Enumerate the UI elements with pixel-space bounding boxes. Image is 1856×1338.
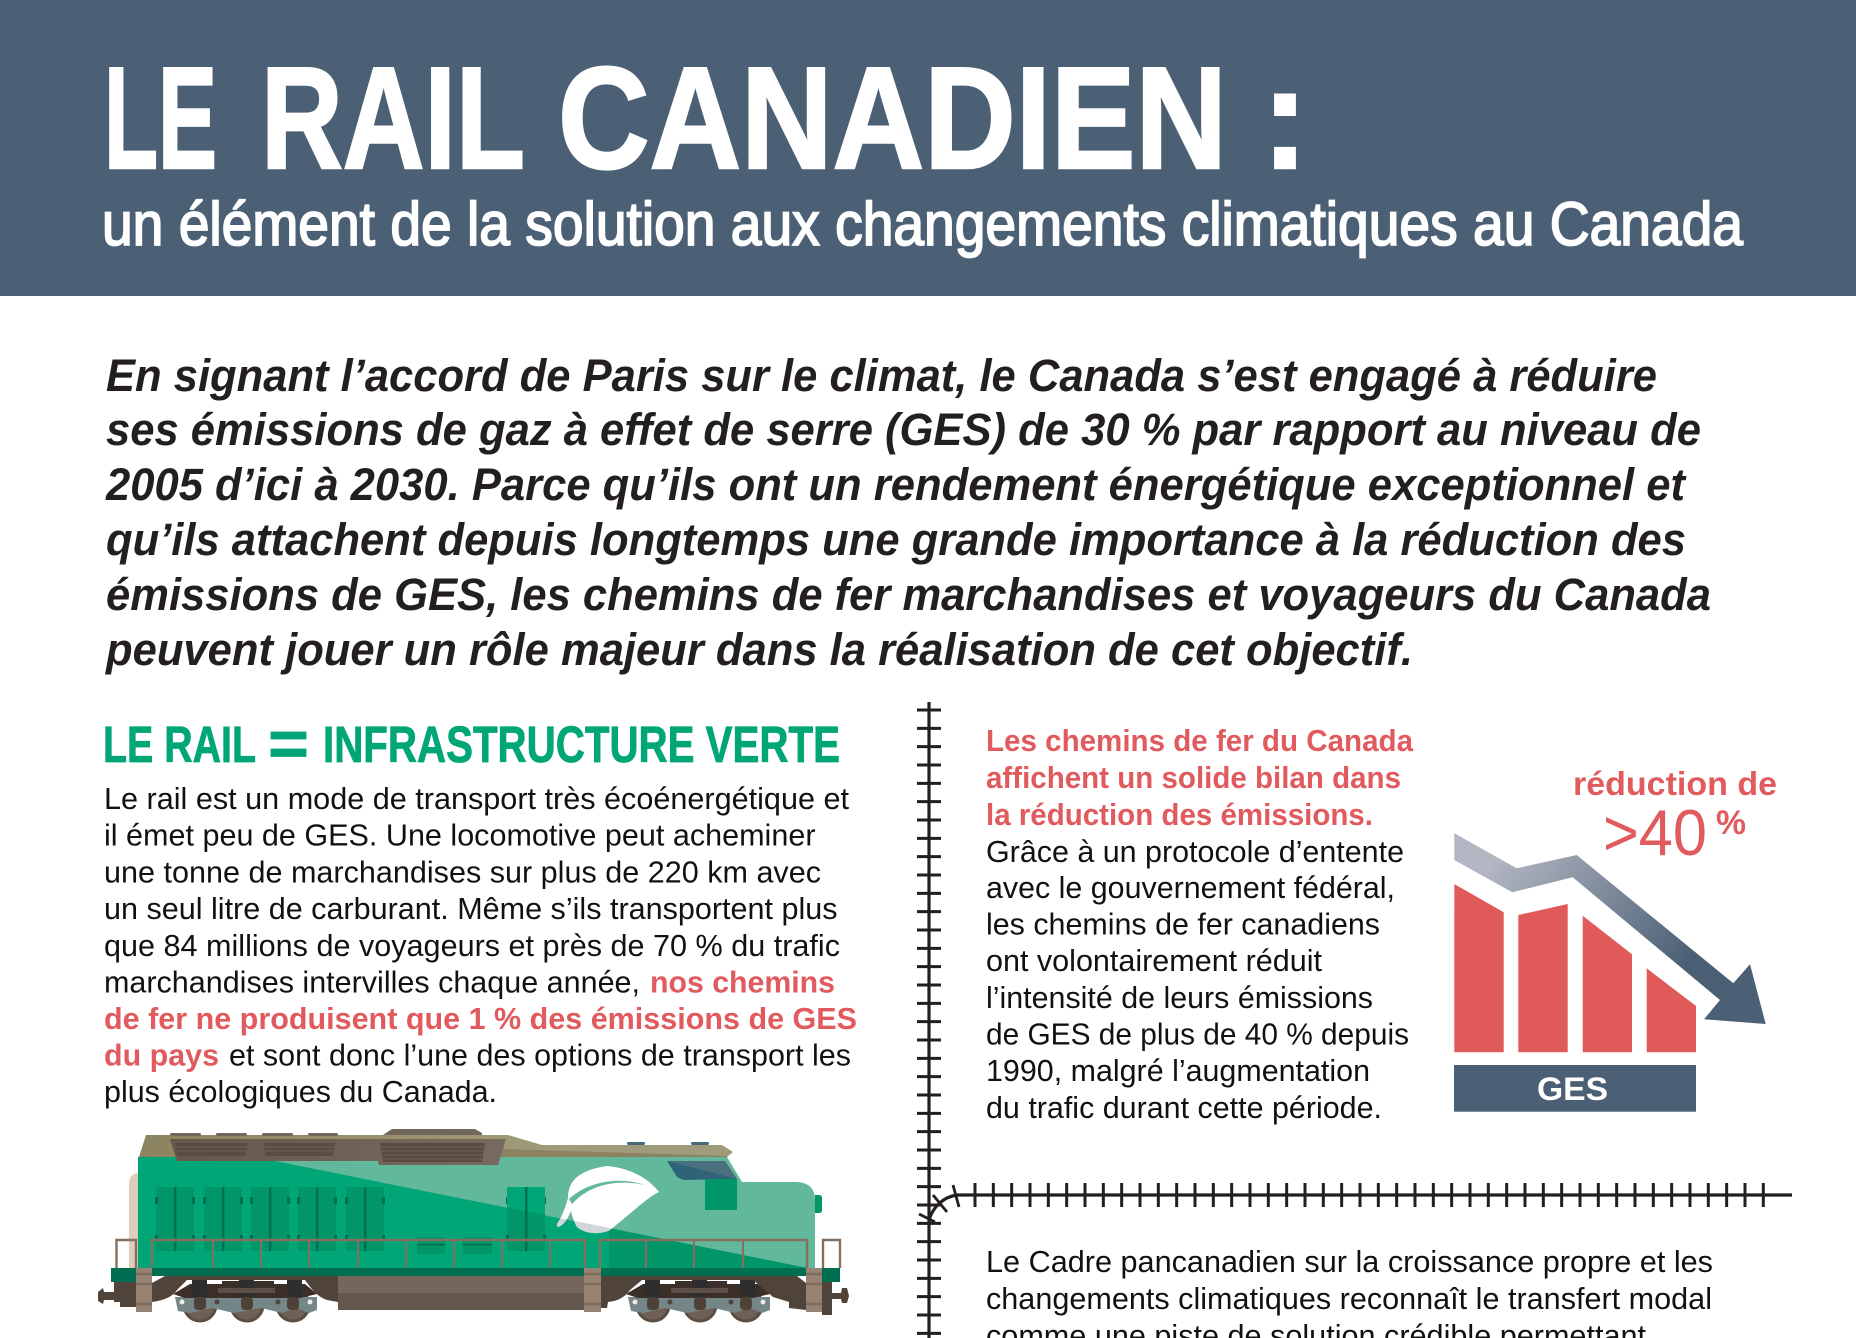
left body text: un seul litre de carburant. Même s’ils transportent plus (104, 892, 838, 926)
modal shift text: Le Cadre pancanadien sur la croissance propre et les (986, 1245, 1713, 1279)
side doors (155, 1187, 546, 1254)
emissions reduction text: ont volontairement réduit (986, 944, 1323, 978)
GES label (1454, 1065, 1696, 1112)
intro paragraph: peuvent jouer un rôle majeur dans la réalisation de cet objectif. (105, 624, 1413, 675)
heading: le rail = infrastructure verte (103, 716, 840, 773)
emissions reduction text: de GES de plus de 40 % depuis (986, 1018, 1409, 1052)
hood and vents (170, 1139, 506, 1165)
intro paragraph: En signant l’accord de Paris sur le climat, le Canada s’est engagé à réduire (106, 350, 1657, 401)
title: RAIL (261, 37, 525, 199)
bars (1454, 884, 1696, 1052)
body (138, 1157, 815, 1268)
underframe and fuel tank (98, 1276, 849, 1315)
chart caption: % (1716, 804, 1746, 842)
heading: le rail = infrastructure verte: = (272, 761, 273, 763)
modal shift text (986, 1245, 1713, 1338)
emissions reduction text: Les chemins de fer du Canada (986, 724, 1414, 758)
emissions reduction text (986, 724, 1414, 1125)
left body text: et sont donc l’une des options de transport les (229, 1038, 851, 1072)
left body text (104, 782, 857, 1109)
illustration: green locomotive (98, 1129, 849, 1321)
heading: le rail = infrastructure verte: INFRASTRUCTURE VERTE (323, 716, 840, 773)
left body text: du pays (104, 1038, 219, 1072)
modal shift text: changements climatiques reconnaît le transfert modal (986, 1282, 1712, 1316)
deck (111, 1268, 840, 1282)
left body text: plus écologiques du Canada. (104, 1075, 497, 1109)
header banner (0, 0, 1856, 296)
intro paragraph: 2005 d’ici à 2030. Parce qu’ils ont un rendement énergétique exceptionnel et (105, 459, 1687, 510)
emissions reduction text: 1990, malgré l’augmentation (986, 1054, 1370, 1088)
left body text: une tonne de marchandises sur plus de 220 km avec (104, 856, 821, 890)
emissions reduction text: Grâce à un protocole d’entente (986, 835, 1404, 869)
title (104, 37, 1308, 199)
railway track divider (919, 702, 1792, 1338)
down arrow (1454, 833, 1766, 1024)
left body text: il émet peu de GES. Une locomotive peut acheminer (104, 818, 816, 852)
rear beige panel (129, 1173, 138, 1268)
heading: le rail = infrastructure verte: LE RAIL (103, 716, 256, 773)
chart caption (1573, 765, 1777, 869)
left body text: nos chemins (650, 966, 835, 1000)
chart caption: réduction de (1573, 765, 1777, 802)
intro paragraph (105, 350, 1711, 675)
intro paragraph: ses émissions de gaz à effet de serre (GES) de 30 % par rapport au niveau de (106, 404, 1701, 455)
GES label: GES (1537, 1071, 1608, 1107)
left body text: que 84 millions de voyageurs et près de 70 % du trafic (104, 929, 840, 963)
intro paragraph: qu’ils attachent depuis longtemps une grande importance à la réduction des (106, 514, 1686, 565)
roof (139, 1129, 733, 1157)
steps (136, 1268, 822, 1312)
left body text: Le rail est un mode de transport très écoénergétique et (104, 782, 850, 816)
emissions reduction text: avec le gouvernement fédéral, (986, 871, 1395, 905)
title: CANADIEN (558, 37, 1227, 199)
title: : (1262, 37, 1308, 199)
leaf logo (557, 1166, 659, 1233)
trucks and wheels (173, 1280, 770, 1321)
emissions reduction text: l’intensité de leurs émissions (986, 981, 1373, 1015)
chart caption: >40 (1603, 796, 1707, 869)
nose light (815, 1195, 822, 1213)
emissions reduction text: la réduction des émissions. (986, 798, 1373, 832)
left body text: de fer ne produisent que 1 % des émissions de GES (104, 1002, 857, 1036)
emissions reduction text: du trafic durant cette période. (986, 1091, 1382, 1125)
emissions reduction text: affichent un solide bilan dans (986, 761, 1401, 795)
dark green diagonal (138, 1157, 807, 1268)
intro paragraph: émissions de GES, les chemins de fer marchandises et voyageurs du Canada (106, 569, 1711, 620)
left body text: marchandises intervilles chaque année, (104, 966, 640, 1000)
cab window (667, 1161, 737, 1210)
title: LE (104, 37, 217, 199)
chart: emissions reduction (1454, 765, 1777, 1112)
railings (116, 1240, 840, 1268)
emissions reduction text: les chemins de fer canadiens (986, 908, 1380, 942)
